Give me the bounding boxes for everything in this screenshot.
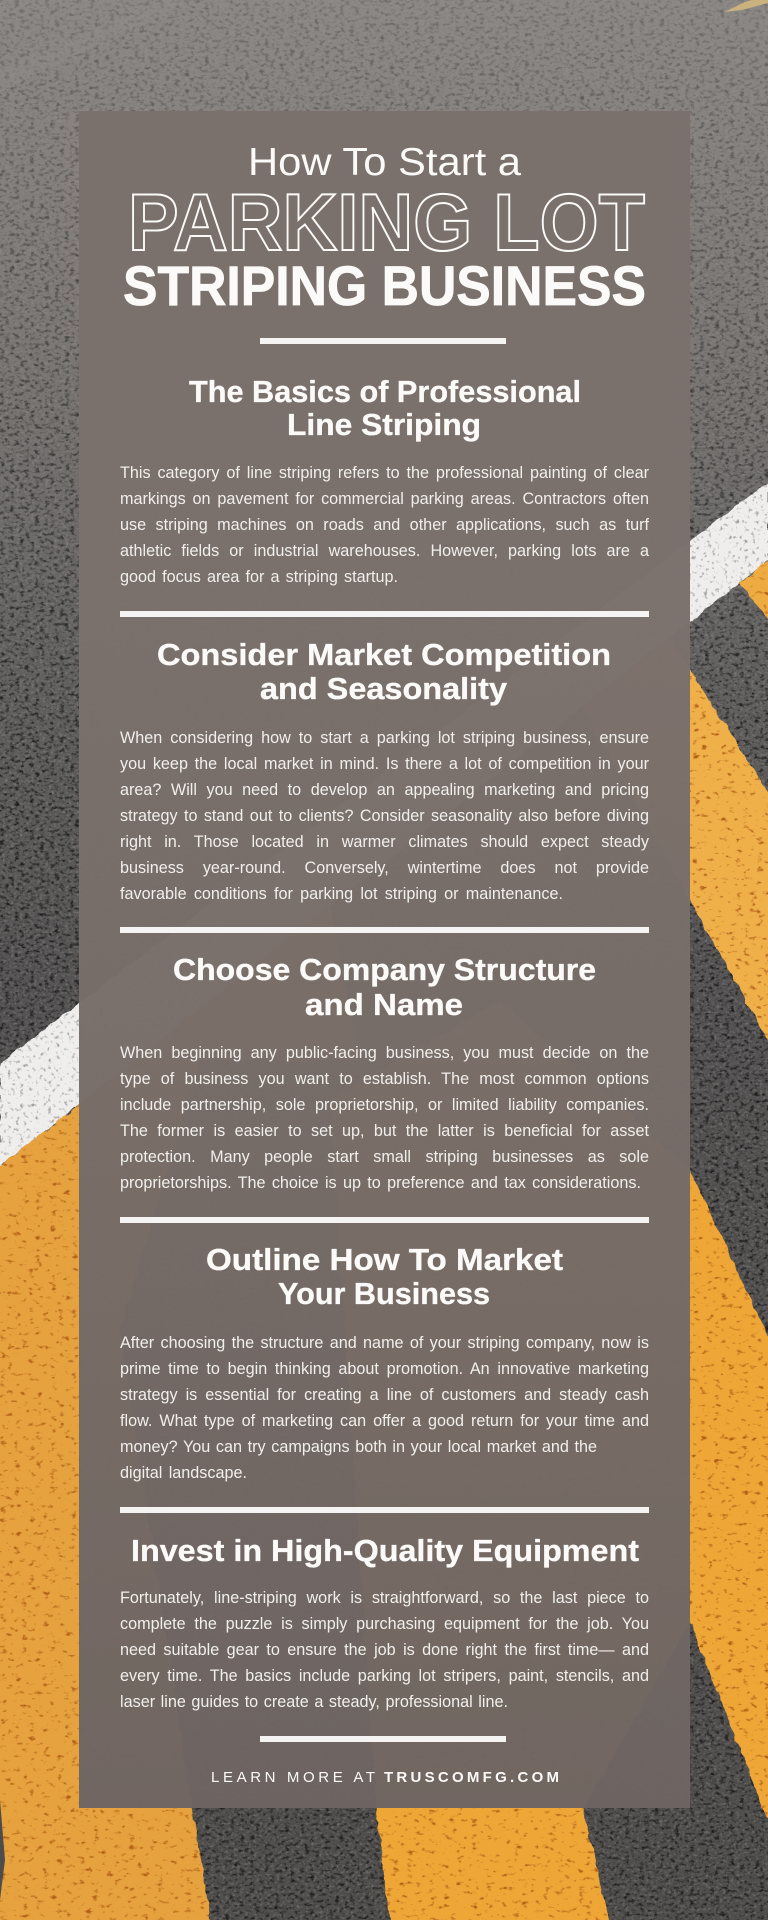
panel: translucent grey content card: [79, 111, 690, 1808]
body text: protection. Many people start small striping businesses as sole: [120, 1148, 649, 1166]
body text: markings on pavement for commercial parking areas. Contractors often: [120, 490, 649, 508]
body text: need suitable gear to ensure the job is done right the first time— and: [120, 1641, 649, 1659]
body text: [120, 1044, 649, 1192]
body text: prime time to begin thinking about promotion. An innovative marketing: [120, 1360, 649, 1378]
heading: [206, 1242, 563, 1311]
footer: source line: TRUSCOMFG.COM: [384, 1769, 559, 1786]
body text: [120, 1589, 649, 1711]
title line: How To Start a: How To Start a: [248, 141, 521, 184]
body text: [120, 464, 650, 586]
body text: When considering how to start a parking lot striping business, ensure: [120, 729, 649, 747]
heading: [189, 374, 581, 442]
divider: [120, 1217, 649, 1222]
heading: Your Business: [278, 1276, 490, 1311]
heading: Consider Market Competition: [157, 637, 611, 672]
body text: [120, 729, 649, 903]
body text: After choosing the structure and name of your striping company, now is: [120, 1334, 649, 1352]
title line: outlined PARKING LOT: PARKING LOT: [128, 178, 645, 268]
body text: money? You can try campaigns both in your local market and the: [120, 1438, 597, 1456]
heading: Line Striping: [287, 407, 481, 442]
body text: This category of line striping refers to the professional painting of clear: [120, 464, 649, 482]
section: Outline How To Market Your Business: [120, 1242, 649, 1482]
heading: Choose Company Structure: [173, 952, 596, 987]
section: The Basics of Professional Line Striping: [120, 374, 650, 586]
heading: Outline How To Market: [206, 1242, 563, 1277]
divider under title: [260, 338, 506, 344]
section: Invest in High-Quality Equipment: [120, 1533, 649, 1711]
section: Consider Market Competition and Seasonality: [120, 637, 649, 903]
divider above footer: [260, 1736, 506, 1742]
divider: [120, 611, 649, 616]
body text: The former is easier to set up, but the latter is beneficial for asset: [120, 1122, 649, 1140]
body text: Fortunately, line-striping work is straightforward, so the last piece to: [120, 1589, 649, 1607]
body text: include partnership, sole proprietorship, or limited liability companies.: [120, 1096, 649, 1114]
body text: you keep the local market in mind. Is there a lot of competition in your: [120, 755, 649, 773]
body text: complete the puzzle is simply purchasing equipment for the job. You: [120, 1615, 649, 1633]
body text: strategy to stand out to clients? Consider seasonality also before diving: [120, 807, 649, 825]
body text: good focus area for a striping startup.: [120, 568, 398, 586]
heading: and Seasonality: [260, 671, 508, 706]
body text: proprietorships. The choice is up to preference and tax considerations.: [120, 1174, 641, 1192]
body text: When beginning any public-facing business, you must decide on the: [120, 1044, 649, 1062]
body text: strategy is essential for creating a line of customers and steady cash: [120, 1386, 649, 1404]
body text: flow. What type of marketing can offer a good return for your time and: [120, 1412, 649, 1430]
body text: digital landscape.: [120, 1464, 247, 1482]
body text: area? Will you need to develop an appealing marketing and pricing: [120, 781, 649, 799]
footer: source line: [211, 1769, 559, 1786]
heading: Invest in High-Quality Equipment: [131, 1533, 639, 1568]
title line: STRIPING BUSINESS: STRIPING BUSINESS: [123, 254, 646, 317]
body text: type of business you want to establish. The most common options: [120, 1070, 649, 1088]
heading: [157, 637, 611, 706]
footer: source line: LEARN MORE AT: [211, 1769, 375, 1786]
body text: business year-round. Conversely, wintertime does not provide: [120, 859, 649, 877]
heading: The Basics of Professional: [189, 374, 581, 409]
section: Choose Company Structure and Name: [120, 952, 649, 1192]
heading: [173, 952, 596, 1022]
body text: laser line guides to create a steady, professional line.: [120, 1693, 508, 1711]
heading: and Name: [305, 987, 463, 1022]
body text: [120, 1334, 649, 1482]
body text: favorable conditions for parking lot striping or maintenance.: [120, 885, 563, 903]
body text: every time. The basics include parking lot stripers, paint, stencils, and: [120, 1667, 649, 1685]
body text: athletic fields or industrial warehouses. However, parking lots are a: [120, 542, 649, 560]
body text: use striping machines on roads and other applications, such as turf: [120, 516, 649, 534]
divider: [120, 927, 649, 932]
title: How To Start a Parking Lot Striping Business: [123, 141, 646, 317]
body text: right in. Those located in warmer climates should expect steady: [120, 833, 649, 851]
divider: [120, 1507, 649, 1512]
